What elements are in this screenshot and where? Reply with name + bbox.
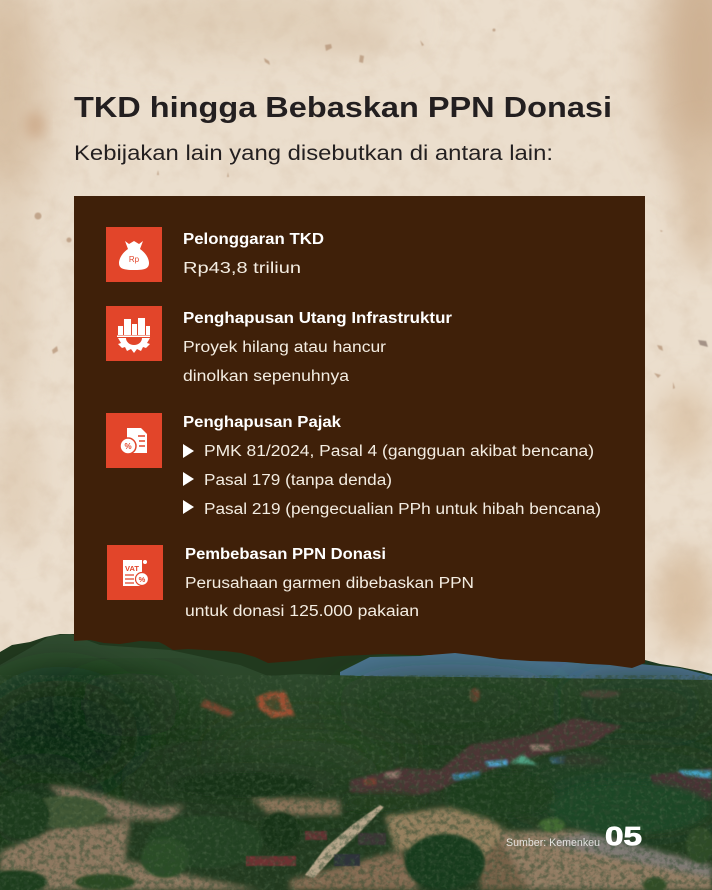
distant blue mountains bbox=[340, 652, 712, 692]
text: Pasal 219: Pasal 219 (pengecualian PPh untuk hibah bencana) bbox=[204, 501, 601, 518]
paper stains bbox=[34, 28, 708, 389]
arrow bullet bbox=[183, 500, 194, 514]
source: Sumber: Kemenkeu bbox=[506, 837, 600, 849]
text: Proyek hilang atau hancur: Proyek hilang atau hancur bbox=[183, 339, 386, 356]
item: Penghapusan Utang Infrastruktur bbox=[106, 306, 452, 385]
foreground trees bbox=[0, 773, 712, 890]
icon: VAT document: VAT bbox=[125, 564, 139, 573]
icon: city on gear bbox=[106, 306, 162, 361]
text: Perusahaan garmen: Perusahaan garmen dibebaskan PPN bbox=[185, 575, 474, 592]
heading: Penghapusan Utang Infrastruktur: Penghapusan Utang Infrastruktur bbox=[183, 310, 452, 327]
forest tone blobs bbox=[0, 680, 712, 834]
icon: VAT document: % bbox=[139, 575, 146, 584]
landslide scars bbox=[200, 688, 620, 718]
trees between the houses bbox=[345, 755, 710, 834]
item: Pelonggaran TKD bbox=[106, 227, 324, 282]
icon: VAT document bbox=[107, 545, 163, 600]
text: dinolkan sepenuhnya: dinolkan sepenuhnya bbox=[183, 368, 349, 385]
arrow bullet bbox=[183, 444, 194, 458]
text: PMK 81/2024: PMK 81/2024, Pasal 4 (gangguan akibat bencana) bbox=[204, 443, 594, 460]
mud and debris bbox=[0, 785, 712, 890]
text: untuk donasi: untuk donasi 125.000 pakaian bbox=[185, 603, 419, 620]
heading: Penghapusan Pajak: Penghapusan Pajak bbox=[183, 414, 341, 431]
subtitle: Kebijakan lain yang disebutkan di antara lain: bbox=[74, 142, 553, 165]
icon: tax document and coin: % bbox=[124, 442, 132, 451]
item: Penghapusan Pajak bbox=[106, 413, 601, 518]
village roofs bbox=[350, 718, 712, 802]
far hill on left bbox=[0, 634, 712, 740]
photo: flooded valley village bbox=[0, 630, 712, 890]
panel: policy list bbox=[74, 196, 645, 668]
icon: money bag bbox=[106, 227, 162, 282]
text: Rp43,8 triliun: Rp43,8 triliun bbox=[183, 260, 301, 277]
text: Pasal 179: Pasal 179 (tanpa denda) bbox=[204, 472, 392, 489]
item: Pembebasan PPN Donasi bbox=[107, 545, 474, 620]
background: aged paper with torn lower edge bbox=[0, 0, 712, 680]
forest texture bbox=[0, 675, 712, 890]
title: TKD hingga Bebaskan PPN Donasi bbox=[74, 92, 612, 124]
arrow bullet bbox=[183, 472, 194, 486]
icon: tax document and coin bbox=[106, 413, 162, 468]
page number: 05 bbox=[605, 821, 642, 851]
heading: Pembebasan PPN Donasi: Pembebasan PPN Donasi bbox=[185, 546, 386, 563]
forest highlights bbox=[0, 675, 712, 890]
icon: money bag: Rp bbox=[129, 255, 140, 264]
road and houses bbox=[246, 805, 386, 878]
heading: Pelonggaran TKD: Pelonggaran TKD bbox=[183, 231, 324, 248]
